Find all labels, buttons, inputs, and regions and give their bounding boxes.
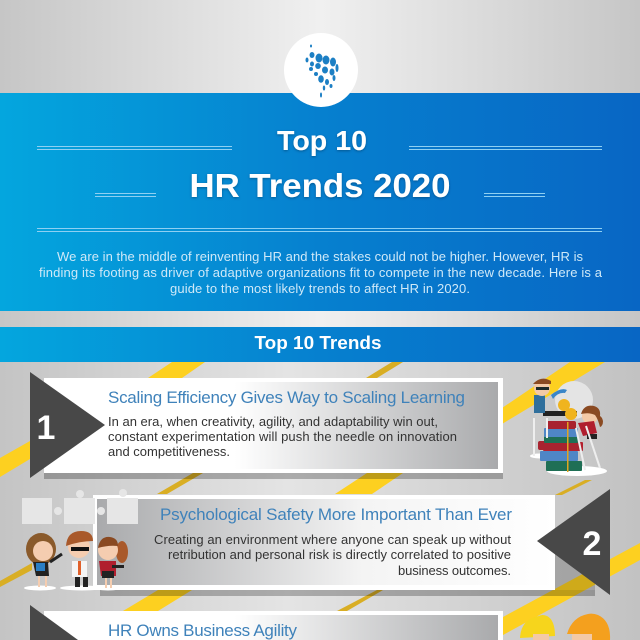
number badge 2: [537, 489, 610, 595]
title: HR Trends 2020: HR Trends 2020: [190, 167, 450, 204]
body 2: business outcomes.: [398, 563, 511, 578]
logo circle: [284, 33, 358, 107]
number badge 3: [30, 605, 78, 640]
yellow diagonal stripes: [0, 362, 640, 635]
man middle: [68, 536, 90, 558]
body 1: [108, 414, 457, 459]
title rules: [37, 146, 602, 232]
intro paragraph: We are in the middle of reinventing HR and the stakes could not be higher. However, HR is: [57, 249, 584, 264]
title: Top 10: Top 10: [277, 125, 367, 156]
body 2: Creating an environment where anyone can speak up without: [154, 532, 511, 547]
number badge 2: 2: [583, 525, 601, 563]
section heading bar: [0, 327, 640, 362]
light separator strip: [0, 311, 640, 327]
card 3: [44, 611, 503, 640]
body 1: In an era, when creativity, agility, and adaptability win out,: [108, 414, 438, 429]
card shadow: [555, 545, 595, 590]
intro paragraph: [39, 249, 603, 296]
woman right: [116, 541, 128, 563]
heading 3: HR Owns Business Agility: [108, 621, 298, 640]
body 2: [154, 532, 511, 578]
illustration: team with puzzle pieces: [22, 489, 138, 590]
card shadow: [44, 473, 503, 479]
gray trends section: [0, 362, 640, 640]
intro paragraph: guide to the most likely trends to affect HR in 2020.: [170, 281, 470, 296]
card 1: [44, 378, 503, 473]
girl: [582, 408, 598, 424]
illustration: people on book stack: [530, 379, 607, 476]
boy: [534, 395, 545, 413]
blue header banner: [0, 93, 640, 311]
heading 1: Scaling Efficiency Gives Way to Scaling Learning: [108, 388, 465, 407]
body 2: retribution and personal risk is directly correlated to positive: [168, 547, 511, 562]
illustration: hard hat workers: [520, 614, 610, 640]
heading 2: Psychological Safety More Important Than Ever: [160, 505, 512, 524]
number badge 1: [30, 372, 105, 478]
trend 2: [93, 489, 610, 596]
number badge 1: 1: [37, 409, 55, 447]
trend 3: [30, 605, 503, 640]
woman left: [26, 533, 56, 565]
top gray band: [0, 0, 640, 93]
intro paragraph: finding its footing as driver of adaptive organizations fit to compete in the new decade. Here is a: [39, 265, 603, 280]
trend 1: [30, 372, 503, 479]
body 1: and competitiveness.: [108, 444, 230, 459]
card 2: [93, 495, 555, 590]
body 1: constant experimentation will push the needle on innovation: [108, 429, 457, 444]
section heading bar: Top 10 Trends: [254, 333, 382, 353]
